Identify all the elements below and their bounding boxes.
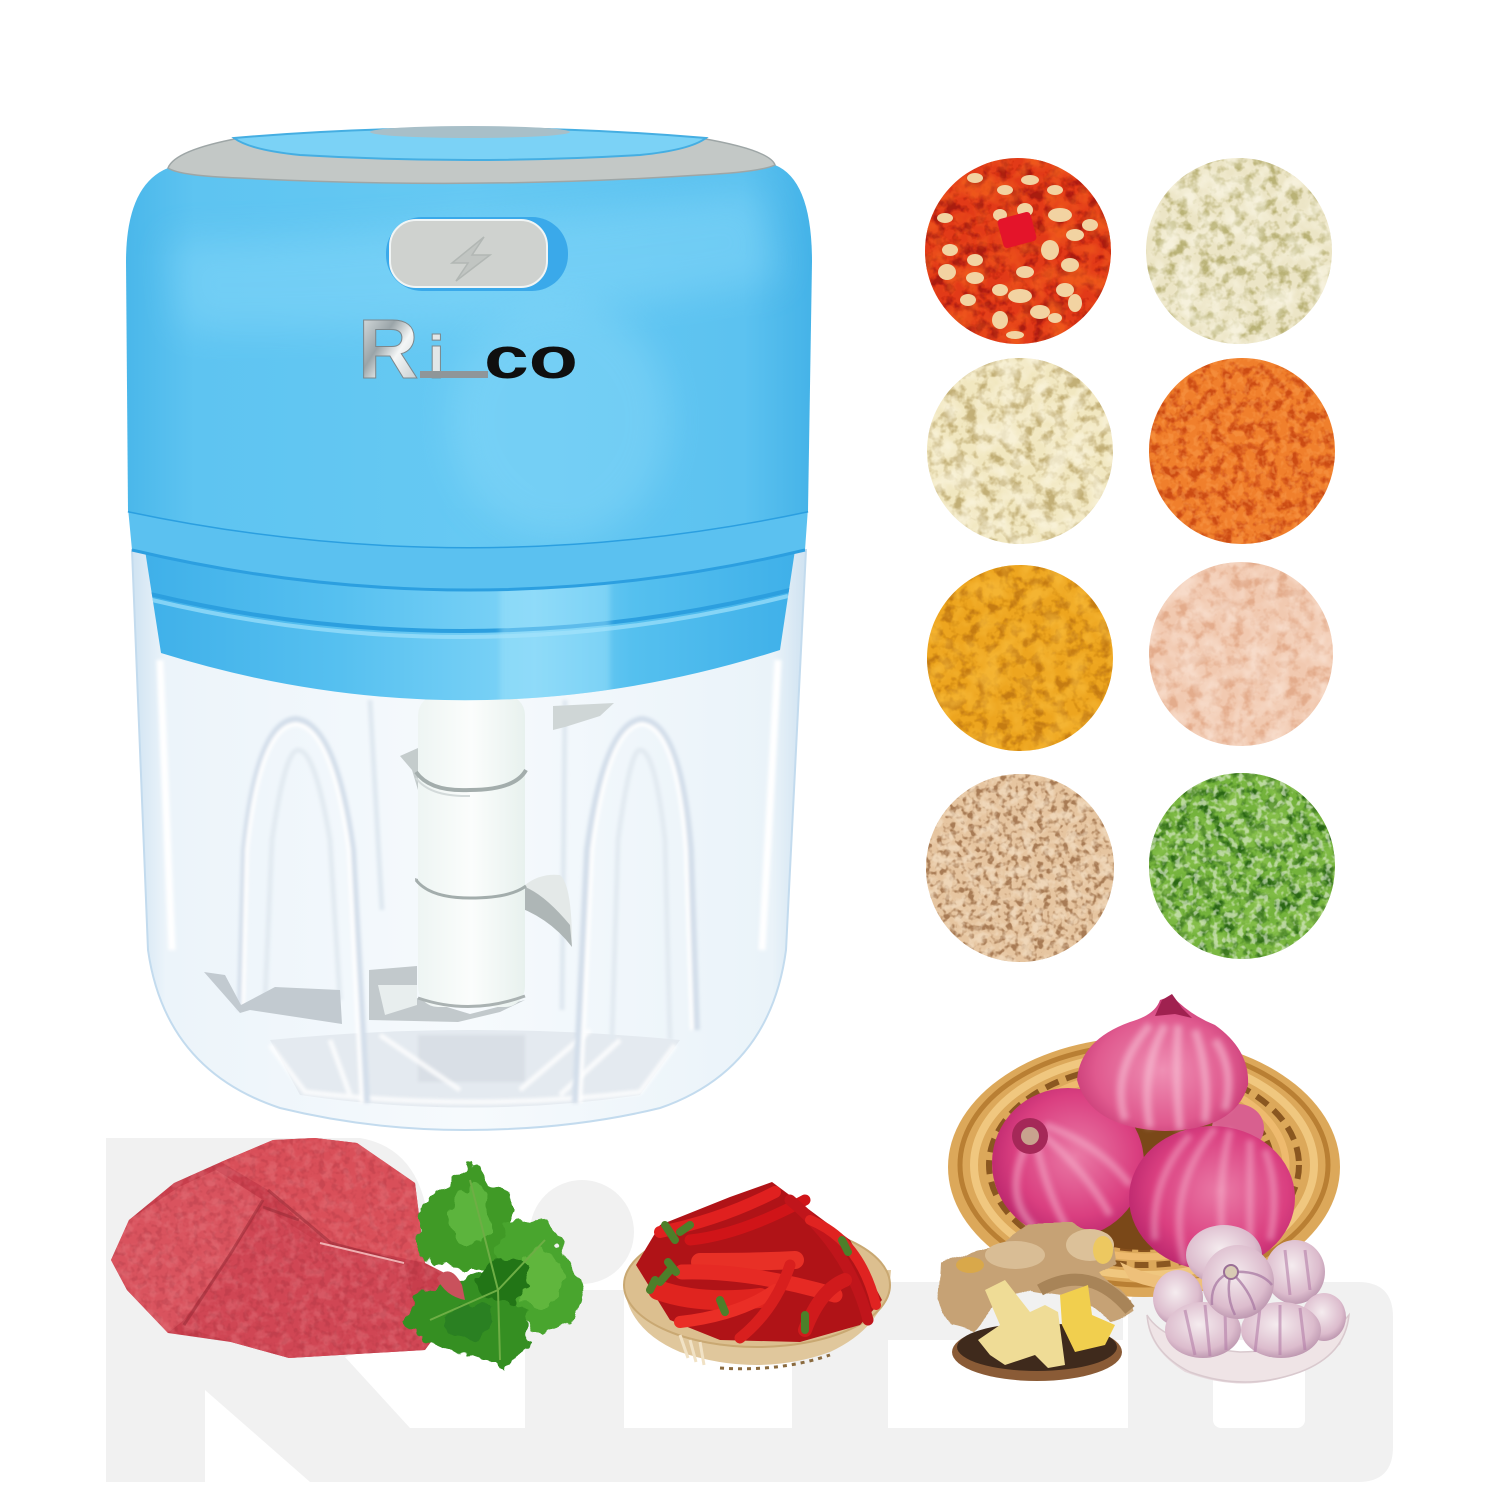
garlic in white dish — [1147, 1225, 1349, 1384]
onion: top — [1077, 994, 1248, 1131]
wicker basket — [948, 1037, 1340, 1297]
circle: chopped herbs — [1149, 773, 1335, 959]
circle: minced ginger — [927, 358, 1113, 544]
onion root tip — [1012, 1118, 1048, 1154]
wooden dish — [952, 1323, 1122, 1381]
onion: back right — [1212, 1104, 1264, 1152]
top window — [370, 126, 570, 138]
circle: minced carrot — [1149, 358, 1335, 544]
circle: minced shrimp — [1149, 562, 1333, 746]
jar inner ribs — [241, 700, 696, 1103]
top blue disc — [234, 128, 706, 160]
power button — [386, 217, 568, 291]
ginger roots — [938, 1225, 1133, 1332]
watermark: Rico — [84, 1052, 1393, 1496]
grey top ring — [168, 128, 775, 183]
circle: minced yellow pepper — [927, 565, 1113, 751]
steel blades — [204, 703, 614, 1024]
chilli pile — [636, 1182, 882, 1342]
transparent jar — [132, 550, 806, 1130]
watermark: Rico: R — [84, 1052, 369, 1494]
watermark: Rico: c — [800, 1267, 839, 1345]
circle: minced pale garlic — [1146, 158, 1332, 344]
red onions — [992, 994, 1295, 1270]
circle: ground meat — [926, 774, 1114, 962]
bamboo bowl — [624, 1270, 891, 1365]
raw beef — [111, 1138, 472, 1358]
parsley — [405, 1165, 585, 1370]
onion: right — [1129, 1126, 1295, 1270]
chopped food circles — [925, 158, 1335, 962]
infographic canvas — [106, 126, 1393, 1482]
ginger — [938, 1225, 1133, 1381]
onion: left — [992, 1088, 1144, 1238]
watermark: Rico: i — [560, 1284, 613, 1496]
brand logo: i — [428, 324, 445, 391]
lower lid ledge — [128, 508, 808, 590]
circle: chopped red chilli — [925, 158, 1111, 344]
centre shaft — [416, 695, 526, 1007]
blue lid — [126, 126, 812, 547]
lower collar — [145, 550, 795, 710]
brand logo: co — [484, 326, 578, 391]
brand logo: R — [358, 302, 419, 396]
product: blue mini chopper — [126, 126, 812, 1130]
sliced ginger — [978, 1280, 1065, 1368]
bowl of red chillies — [624, 1182, 891, 1369]
brand logo — [358, 302, 578, 396]
watermark: Rico: o — [1320, 1320, 1375, 1420]
